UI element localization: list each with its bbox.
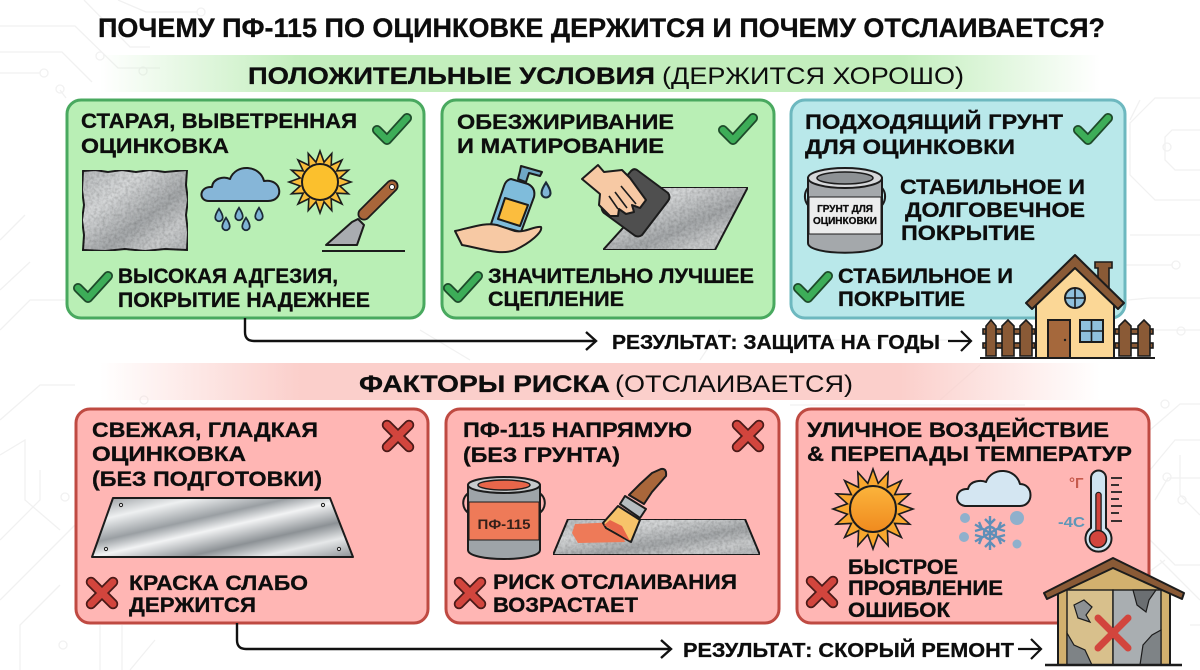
icon: check xyxy=(448,276,478,298)
card heading xyxy=(807,418,1132,466)
panel: suitable primer xyxy=(791,100,1125,318)
benefit text: ПОКРЫТИЕ xyxy=(901,222,1035,245)
icon: sun xyxy=(289,151,351,213)
panel: fresh smooth galvanizing xyxy=(76,409,428,623)
result text: СТАБИЛЬНОЕ И xyxy=(838,265,1013,288)
icon: cross xyxy=(91,582,113,604)
card heading: СВЕЖАЯ, ГЛАДКАЯ xyxy=(92,419,318,442)
icon: thermometer xyxy=(1058,471,1122,552)
arrow: positive flow to result xyxy=(245,318,596,350)
arrow: to house xyxy=(948,331,971,351)
result text: РИСК ОТСЛАИВАНИЯ xyxy=(493,571,737,594)
can label xyxy=(813,204,877,227)
arrow: to damaged house xyxy=(1018,639,1041,659)
card heading: И МАТИРОВАНИЕ xyxy=(457,135,664,158)
panel: old weathered galvanizing xyxy=(67,100,424,318)
card heading xyxy=(463,419,692,467)
arrow: risk flow to result xyxy=(237,623,671,658)
result text xyxy=(493,571,737,617)
icon: cross xyxy=(387,425,409,447)
benefit text: ДОЛГОВЕЧНОЕ xyxy=(905,199,1085,222)
icon: cross xyxy=(459,582,481,604)
card heading: УЛИЧНОЕ ВОЗДЕЙСТВИЕ xyxy=(807,418,1109,442)
result text: ПРОЯВЛЕНИЕ xyxy=(848,577,1003,600)
panel: degreasing and matting xyxy=(442,100,774,318)
icon: hand with sanding pad xyxy=(582,165,748,250)
result text xyxy=(118,265,370,312)
heading: positive conditions: (ДЕРЖИТСЯ ХОРОШО) xyxy=(662,63,964,90)
icon: scraper xyxy=(322,184,405,251)
card heading: & ПЕРЕПАДЫ ТЕМПЕРАТУР xyxy=(807,443,1132,466)
icon: check xyxy=(1078,118,1108,140)
panel: PF-115 without primer xyxy=(446,409,779,623)
benefit text: СТАБИЛЬНОЕ И xyxy=(900,176,1085,199)
icon: thermometer: °Г xyxy=(1069,475,1084,492)
icon: metal sheet with brush xyxy=(553,469,760,555)
card heading: ПФ-115 НАПРЯМУЮ xyxy=(463,419,692,442)
heading: positive conditions xyxy=(248,63,964,90)
result text: КРАСКА СЛАБО xyxy=(129,572,308,595)
icon: weathered zinc sheet xyxy=(82,170,188,251)
result text: ОШИБОК xyxy=(848,599,950,622)
icon: cross xyxy=(811,581,833,603)
result: protection for years: РЕЗУЛЬТАТ: ЗАЩИТА НА ГОДЫ xyxy=(612,331,940,354)
icon: check xyxy=(377,118,407,140)
card heading: ОЦИНКОВКА xyxy=(92,443,246,466)
heading: risk factors xyxy=(359,371,853,398)
heading: risk factors: (ОТСЛАИВАЕТСЯ) xyxy=(615,371,853,398)
icon: check xyxy=(798,276,828,298)
icon: damaged house xyxy=(1044,558,1184,665)
card heading: (БЕЗ ГРУНТА) xyxy=(463,444,620,467)
card heading: СТАРАЯ, ВЫВЕТРЕННАЯ xyxy=(81,110,357,133)
icon: rain cloud xyxy=(201,168,279,230)
result text: ВОЗРАСТАЕТ xyxy=(493,594,638,617)
card heading xyxy=(92,419,322,491)
heading: positive conditions: ПОЛОЖИТЕЛЬНЫЕ УСЛОВИЯ xyxy=(248,63,655,90)
card heading xyxy=(805,110,1063,159)
icon: PF-115 paint can: ПФ-115 xyxy=(478,517,531,532)
result text: ПОКРЫТИЕ НАДЕЖНЕЕ xyxy=(118,289,370,312)
card heading: ОБЕЗЖИРИВАНИЕ xyxy=(457,111,674,134)
panel: outdoor exposure and temperature swings xyxy=(797,409,1149,623)
result text: ДЕРЖИТСЯ xyxy=(129,594,256,617)
icon: soap bottle on hand xyxy=(455,166,550,252)
result: quick repair: РЕЗУЛЬТАТ: СКОРЫЙ РЕМОНТ xyxy=(683,638,1014,662)
icon: primer can xyxy=(805,168,885,253)
icon: sun xyxy=(833,469,913,549)
icon: smooth metal sheet xyxy=(92,498,353,557)
can label: ГРУНТ ДЛЯ xyxy=(817,204,873,215)
result text: СЦЕПЛЕНИЕ xyxy=(488,288,624,311)
icon: snow cloud xyxy=(957,471,1030,550)
icon: house with fence xyxy=(980,255,1155,358)
result text xyxy=(848,556,1003,622)
main title: ПОЧЕМУ ПФ-115 ПО ОЦИНКОВКЕ ДЕРЖИТСЯ И ПОЧЕМУ ОТСЛАИВАЕТСЯ? xyxy=(98,13,1105,43)
card heading: (БЕЗ ПОДГОТОВКИ) xyxy=(92,468,322,491)
heading: risk factors: ФАКТОРЫ РИСКА xyxy=(359,371,610,398)
icon: cross xyxy=(737,425,759,447)
fence xyxy=(983,320,1153,356)
icon: PF-115 paint can xyxy=(463,477,545,559)
card heading xyxy=(81,110,357,158)
card heading: ДЛЯ ОЦИНКОВКИ xyxy=(805,136,1015,159)
red section band xyxy=(100,363,1100,400)
result text: ПОКРЫТИЕ xyxy=(838,288,965,311)
result text xyxy=(838,265,1013,311)
result text xyxy=(488,265,754,311)
card heading: ОЦИНКОВКА xyxy=(81,135,229,158)
can label: ОЦИНКОВКИ xyxy=(813,216,877,227)
icon: check xyxy=(78,276,108,298)
icon: check xyxy=(723,118,753,140)
card heading: ПОДХОДЯЩИЙ ГРУНТ xyxy=(805,110,1063,134)
result text xyxy=(129,572,308,617)
green section band xyxy=(100,55,1100,92)
card heading xyxy=(457,111,674,158)
icon: thermometer: -4C xyxy=(1058,514,1085,531)
result text: ВЫСОКАЯ АДГЕЗИЯ, xyxy=(118,265,338,288)
result text: БЫСТРОЕ xyxy=(848,556,958,579)
benefit text xyxy=(900,176,1085,245)
result text: ЗНАЧИТЕЛЬНО ЛУЧШЕЕ xyxy=(488,265,754,288)
